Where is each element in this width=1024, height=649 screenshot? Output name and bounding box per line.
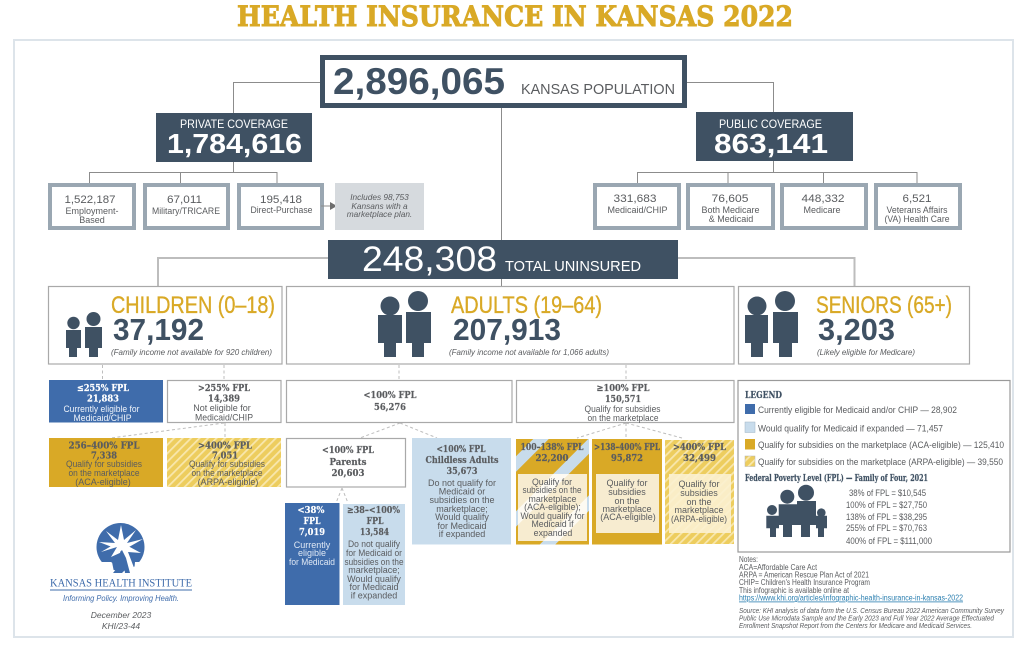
legend item: arpa-eligible: Qualify for subsidies on the marketplace (ARPA-eligible) — 39,550 (758, 457, 1003, 467)
connector lines (90, 82, 917, 503)
icon: sunburst (95, 523, 146, 573)
parents: 38 to 100% FPL: Would qualify (347, 574, 401, 584)
marketplace note: Kansans with a (351, 201, 408, 211)
fpl table: 138% of FPL = $38,295 (846, 512, 927, 522)
fpl table: 255% of FPL = $70,763 (846, 523, 927, 533)
adults: 138-400% FPL: 95,872 (611, 453, 643, 464)
public: veterans affairs: Veterans Affairs (886, 205, 948, 215)
children: 256-400% FPL: (ACA-eligible) (75, 477, 131, 487)
adults: childless adults: Do not qualify for (428, 478, 496, 488)
population box (322, 58, 684, 106)
logo: kansas health institute (50, 523, 192, 603)
fpl table (846, 488, 932, 546)
adults: childless adults: Childless Adults (426, 455, 498, 466)
adults: childless adults: Medicaid or (439, 486, 485, 496)
private: employment-based: Employment- (65, 206, 119, 216)
adults: over 400% FPL: marketplace (674, 505, 724, 515)
private: direct-purchase: 195,418 (260, 194, 302, 206)
panel: seniors: SENIORS (65+) (816, 292, 952, 319)
parents: under 38% FPL (285, 503, 340, 605)
adults: over 400% FPL (665, 440, 734, 544)
private coverage box: PRIVATE COVERAGE (180, 119, 288, 131)
parents: 38 to 100% FPL: marketplace; (348, 565, 400, 575)
fpl table: 38% of FPL = $10,545 (849, 488, 926, 498)
children: up to 255% FPL: Medicaid/CHIP (74, 413, 132, 423)
parents: 38 to 100% FPL: if expanded (351, 590, 397, 600)
panel: seniors: (Likely eligible for Medicare) (817, 348, 915, 357)
panel: children: 37,192 (113, 312, 204, 347)
adults: 138-400% FPL: subsidies (608, 487, 646, 497)
public: medicare: Medicare (803, 205, 841, 215)
public: medicaid/chip: 331,683 (614, 193, 656, 205)
public: both medicare and medicaid: 76,605 (712, 193, 748, 205)
children: over 255% FPL (168, 380, 281, 422)
public: both medicare and medicaid (688, 185, 773, 228)
panel: adults: 207,913 (453, 312, 561, 347)
children: up to 255% FPL: ≤255% FPL (77, 383, 129, 394)
legend item: medicaid/chip: Currently eligible for Medicaid and/or CHIP — 28,902 (758, 405, 957, 415)
adults: under 100% FPL (286, 380, 512, 422)
adults: 138-400% FPL: (ACA-eligible) (600, 512, 656, 522)
public: veterans affairs (876, 185, 960, 228)
adults: 138-400% FPL: marketplace (602, 504, 652, 514)
panel: children (48, 286, 282, 364)
parents: 38 to 100% FPL: subsidies on the (344, 557, 404, 567)
icon: seniors (745, 291, 798, 357)
private: employment-based: 1,522,187 (64, 194, 116, 206)
adults: over 400% FPL: on the (686, 497, 712, 507)
total uninsured box: 248,308 (362, 240, 497, 279)
private: military: 67,011 (167, 194, 202, 206)
adults: over 400% FPL: subsidies (680, 488, 718, 498)
panel: seniors: 3,203 (818, 312, 895, 347)
parents: 38 to 100% FPL: 13,584 (360, 527, 389, 538)
public coverage box: PUBLIC COVERAGE (719, 119, 822, 131)
adults: 100-138% FPL: 22,200 (536, 453, 569, 464)
parents: 38 to 100% FPL: ≥38–<100% (347, 505, 400, 516)
children: over 255% FPL: Not eligible for (193, 403, 251, 413)
adults: parents: <100% FPL (322, 445, 374, 456)
children: over 255% FPL: 14,389 (208, 394, 240, 404)
adults: 100-138% FPL: Medicaid if (531, 519, 574, 529)
total uninsured box (328, 240, 678, 279)
adults: childless adults: 35,673 (446, 466, 478, 477)
fpl heading: Federal Poverty Level (FPL) — Family of Four, 2021 (745, 473, 928, 484)
adults: under 100% FPL: 56,276 (374, 402, 406, 413)
private: employment-based: Based (79, 215, 105, 225)
public: both medicare and medicaid: Both Medicare (701, 205, 760, 215)
children: 256-400% FPL: 256–400% FPL (68, 440, 140, 452)
fpl table: 100% of FPL = $27,750 (846, 500, 927, 510)
adults: 100-138% FPL: Qualify for (532, 477, 572, 487)
parents: under 38% FPL: 7,019 (299, 527, 325, 538)
date and publication number (91, 610, 152, 631)
adults: childless adults: for Medicaid (437, 521, 487, 531)
adults: 138-400% FPL: Qualify for (606, 478, 648, 488)
children: over 400% FPL: 7,051 (212, 450, 238, 462)
logo: kansas health institute: Informing Policy. Improving Health. (63, 593, 179, 603)
parents: under 38% FPL: Currently (294, 540, 331, 550)
public: medicare (782, 185, 866, 228)
public: medicaid/chip (595, 185, 679, 228)
notes: CHIP= Children's Health Insurance Program (739, 578, 870, 587)
children: over 255% FPL: >255% FPL (198, 383, 250, 394)
icon: family (766, 485, 827, 537)
public: veterans affairs: (VA) Health Care (884, 214, 950, 224)
adults: 138-400% FPL: >138–400% FPL (594, 442, 660, 453)
source (739, 606, 1005, 630)
adults: at least 100% FPL: Qualify for subsidies (584, 404, 661, 414)
fpl table: 400% of FPL = $111,000 (846, 536, 932, 546)
date and publication number: KHI/23-44 (102, 621, 140, 631)
adults: at least 100% FPL: ≥100% FPL (596, 383, 650, 394)
notes: Notes: (739, 555, 758, 564)
total uninsured box: TOTAL UNINSURED (505, 258, 641, 275)
adults: over 400% FPL: >400% FPL (673, 442, 726, 453)
private: direct-purchase: Direct-Purchase (250, 205, 312, 215)
adults: 100-138% FPL: expanded (534, 528, 572, 538)
legend item: aca-eligible: Qualify for subsidies on the marketplace (ACA-eligible) — 125,410 (758, 440, 1004, 450)
children: up to 255% FPL (49, 380, 163, 423)
children: over 400% FPL: Qualify for subsidies (189, 459, 265, 469)
adults: at least 100% FPL: 150,571 (605, 394, 641, 405)
population box: KANSAS POPULATION (521, 81, 675, 98)
children: 256-400% FPL: 7,338 (91, 450, 117, 462)
public coverage box: 863,141 (714, 128, 828, 159)
children: 256-400% FPL: Qualify for subsidies (66, 459, 142, 469)
children: up to 255% FPL: 21,883 (87, 394, 119, 404)
parents: under 38% FPL: <38% (298, 505, 324, 516)
notes: This infographic is available online at (739, 586, 850, 595)
children: 256-400% FPL (49, 438, 163, 487)
public: both medicare and medicaid: & Medicaid (709, 214, 753, 224)
parents: under 38% FPL: for Medicaid (289, 557, 335, 567)
legend (738, 380, 1010, 552)
adults: childless adults (412, 438, 511, 544)
notes: ACA=Affordable Care Act (739, 563, 818, 572)
title: HEALTH INSURANCE IN KANSAS 2022 (237, 0, 793, 33)
adults: parents (286, 438, 406, 487)
private: employment-based (50, 185, 134, 228)
parents: under 38% FPL: eligible (298, 548, 326, 558)
adults: at least 100% FPL: on the marketplace (588, 413, 658, 423)
marketplace note: Includes 98,753 (350, 192, 409, 202)
panel: seniors (738, 286, 970, 364)
adults: 100-138% FPL: (ACA-eligible); (524, 502, 581, 512)
public: veterans affairs: 6,521 (902, 193, 932, 205)
adults: 138-400% FPL: on the (614, 496, 640, 506)
children: 256-400% FPL: on the marketplace (68, 468, 140, 478)
adults: 100-138% FPL: Would qualify for (520, 511, 585, 521)
notes: ARPA = American Rescue Plan Act of 2021 (739, 570, 869, 580)
panel: adults: (Family income not available for 1,066 adults) (449, 348, 609, 357)
adults: over 400% FPL: Qualify for (678, 479, 720, 489)
children: up to 255% FPL: Currently eligible for (64, 404, 140, 414)
source: Enrollment Snapshot Report from the Centers for Medicare and Medicaid Services. (739, 621, 972, 630)
children: over 400% FPL: (ARPA-eligible) (198, 477, 258, 487)
private: military (145, 185, 228, 228)
public: medicare: 448,332 (802, 193, 844, 205)
adults: childless adults: <100% FPL (436, 444, 486, 455)
adults: 100-138% FPL: subsidies on the (522, 485, 582, 495)
private coverage box (156, 113, 312, 162)
adults: 100-138% FPL: marketplace (529, 494, 577, 504)
adults: childless adults: subsidies on the (429, 495, 495, 505)
adults: 138-400% FPL (592, 439, 662, 544)
adults: over 400% FPL: 32,499 (683, 453, 716, 464)
private: military: Military/TRICARE (152, 206, 220, 216)
parents: under 38% FPL: FPL (304, 516, 321, 527)
adults: under 100% FPL: <100% FPL (364, 390, 417, 401)
parents: 38 to 100% FPL: for Medicaid or (346, 548, 402, 558)
panel: children: CHILDREN (0–18) (111, 292, 275, 319)
icon: children (66, 312, 102, 357)
adults: 100-138% FPL (516, 439, 589, 544)
children: over 255% FPL: Medicaid/CHIP (195, 412, 253, 422)
parents: 38 to 100% FPL: for Medicaid (349, 582, 399, 592)
public: medicaid/chip: Medicaid/CHIP (608, 205, 668, 215)
notes (739, 555, 963, 602)
adults: parents: Parents (330, 457, 366, 468)
public coverage box (696, 112, 853, 161)
adults: at least 100% FPL (516, 380, 734, 423)
panel: children: (Family income not available for 920 children) (111, 348, 272, 357)
private coverage box: 1,784,616 (167, 128, 302, 159)
marketplace note: marketplace plan. (347, 209, 412, 219)
population box: 2,896,065 (333, 61, 505, 102)
panel: adults: ADULTS (19–64) (451, 292, 602, 319)
adults: childless adults: Would qualify (435, 512, 489, 522)
private: direct-purchase (239, 185, 322, 228)
adults: 100-138% FPL: 100–138% FPL (520, 442, 584, 453)
legend: LEGEND (745, 390, 782, 401)
parents: 38 to 100% FPL (343, 504, 405, 605)
parents: 38 to 100% FPL: Do not qualify (348, 539, 400, 549)
parents: 38 to 100% FPL: FPL (366, 516, 384, 527)
children: over 400% FPL (167, 438, 281, 487)
adults: childless adults: if expanded (439, 529, 485, 539)
adults: parents: 20,603 (332, 468, 364, 479)
adults: childless adults: marketplace; (436, 504, 488, 514)
arrow (321, 202, 337, 210)
children: over 400% FPL: >400% FPL (198, 440, 252, 452)
children: over 400% FPL: on the marketplace (192, 468, 262, 478)
date and publication number: December 2023 (91, 610, 152, 620)
panel: adults (286, 286, 734, 364)
marketplace note (335, 183, 424, 230)
adults: over 400% FPL: (ARPA-eligible) (671, 514, 727, 524)
logo: kansas health institute: KANSAS HEALTH INSTITUTE (50, 578, 192, 590)
legend item: would qualify if expanded: Would qualify for Medicaid if expanded — 71,457 (758, 424, 943, 434)
icon: adults (378, 291, 431, 357)
notes: https://www.khi.org/articles/infographic-health-insurance-in-kansas-2022 (739, 594, 963, 602)
